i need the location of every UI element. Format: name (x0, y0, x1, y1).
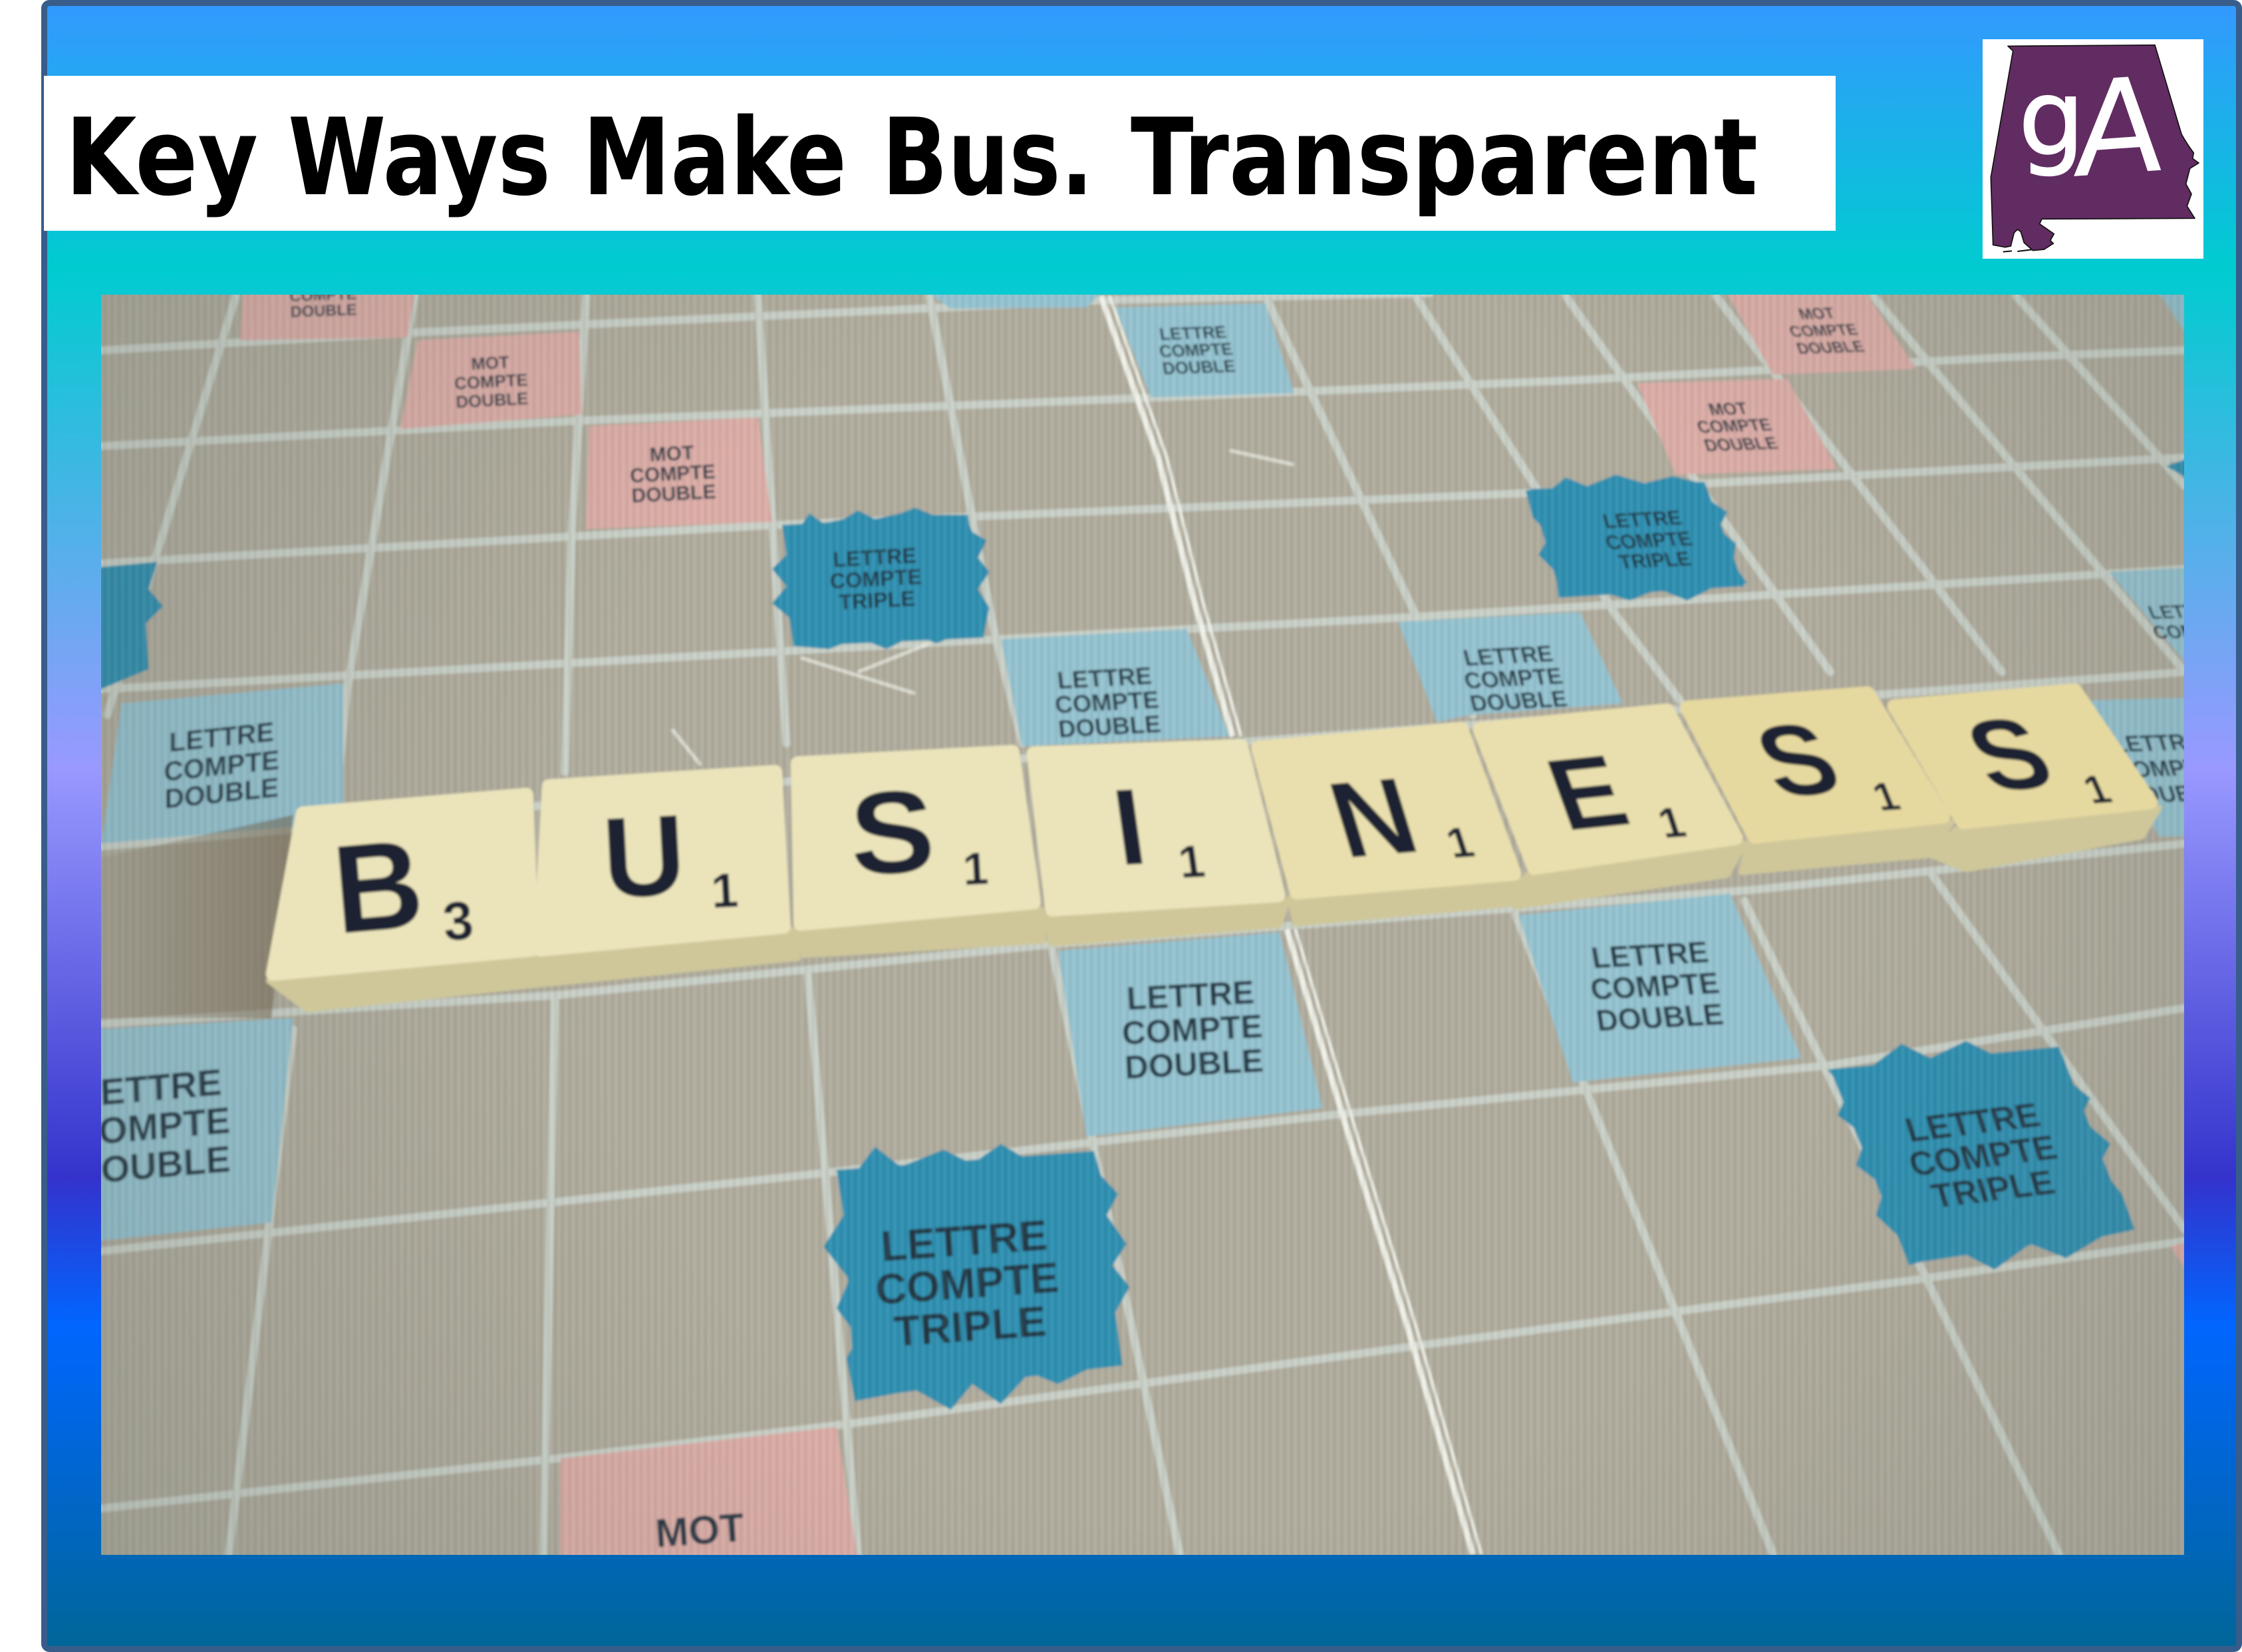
title text: Ways (288, 95, 551, 219)
board square labels: DOUBLE (1594, 998, 1726, 1037)
board squares: pink word scores (240, 293, 2187, 1558)
board square labels: DOUBLE (631, 481, 716, 507)
board square labels: DOUBLE (1057, 710, 1162, 743)
board square labels: MOT (1705, 398, 1751, 419)
tile letters and values: 1 (1652, 798, 1691, 847)
tile letters and values (327, 696, 2118, 960)
tile letters and values: S (1739, 701, 1856, 819)
board square labels: COMPTE (289, 286, 357, 305)
tile letters and values: 1 (1866, 774, 1906, 819)
board square labels: LETTRE (1461, 642, 1556, 671)
board fold and scratches (672, 296, 1844, 1554)
tile top faces (273, 746, 1278, 974)
board square labels: COMPTE (1904, 1129, 2061, 1184)
title text: Key (65, 95, 258, 219)
board square labels: COMPTE (71, 1099, 231, 1155)
board square labels: LETTRE (2108, 729, 2205, 757)
board square labels: COMPTE (164, 744, 279, 787)
board square labels: LETTRE (1126, 974, 1255, 1018)
tile letters and values: 1 (710, 863, 740, 918)
tile letters and values: I (1106, 765, 1153, 888)
board square labels: DOUBLE (1468, 686, 1570, 716)
board square labels: COMPTE (629, 461, 716, 487)
tile letters and values: 1 (962, 843, 990, 895)
tile letters and values: S (1948, 696, 2070, 813)
board square labels: COMPTE (1121, 1008, 1264, 1052)
board square labels: TRIPLE (893, 1297, 1048, 1355)
tile letters and values: 1 (1441, 818, 1479, 867)
board square labels: COMPTE (1158, 340, 1234, 361)
board square labels: COMPTE (2150, 620, 2237, 643)
board square labels (70, 286, 2237, 1604)
board square labels: COMPTE (829, 565, 922, 593)
tile shadow (100, 815, 293, 1018)
tile letters and values: B (327, 812, 428, 960)
board square labels: LETTRE (879, 1211, 1049, 1270)
board square labels: MOT (471, 353, 510, 374)
board square labels: DOUBLE (73, 1137, 231, 1193)
board squares: light blue letter scores (97, 293, 2187, 1241)
board square labels: COMPTE (1786, 321, 1861, 341)
board square labels: MOT (1796, 305, 1838, 323)
board square labels: DOUBLE (2121, 780, 2225, 809)
board square labels: LETTRE (1158, 323, 1228, 344)
board square labels: COMPTE (1588, 966, 1722, 1006)
tile letters and values: 1 (2076, 767, 2118, 812)
board square labels: COMPTE (1053, 686, 1161, 718)
board square labels: TRIPLE (838, 587, 916, 615)
board square labels: COMPTE (1603, 527, 1695, 554)
board square labels: MOT (654, 1505, 746, 1556)
photo: scrabble board spelling BUSINESS (70, 286, 2237, 1604)
tile side faces (269, 808, 2159, 1010)
board square labels: DOUBLE (1701, 434, 1780, 455)
board square labels: COMPTE (1694, 415, 1774, 437)
board square labels: LETTRE (77, 1061, 222, 1115)
board square labels: DOUBLE (456, 390, 529, 412)
board square labels: LETTRE (2145, 601, 2225, 623)
tile letters and values: N (1316, 756, 1431, 881)
board square labels: COMPTE (616, 1548, 790, 1604)
board square labels: LETTRE (1901, 1096, 2044, 1150)
board square labels: MOT (649, 442, 695, 466)
tile letters and values: S (847, 765, 938, 900)
board square labels: COMPTE (1462, 664, 1565, 694)
board square labels: TRIPLE (1927, 1164, 2059, 1216)
logo: gA on Alabama outline: g (2019, 58, 2084, 179)
board square labels: COMPTE (874, 1253, 1060, 1314)
board square labels: DOUBLE (290, 301, 357, 321)
tile letters and values: 3 (440, 890, 476, 953)
board square labels: LETTRE (169, 716, 274, 758)
logo: gA on Alabama outline: A (2072, 48, 2166, 207)
board squares: teal triple letter scores with jagged edges (94, 458, 2191, 1410)
tile letters and values: 1 (1175, 836, 1208, 888)
board square labels: DOUBLE (1124, 1042, 1264, 1086)
board square labels: LETTRE (1600, 507, 1685, 533)
board square labels: DOUBLE (1161, 357, 1237, 378)
board square labels: DOUBLE (164, 771, 279, 815)
tile letters and values: U (599, 791, 688, 922)
board square labels: LETTRE (1589, 935, 1711, 975)
title text: Make (583, 95, 847, 219)
board square labels: COMPTE (454, 371, 528, 393)
title text: Bus. (882, 95, 1093, 219)
tile letters and values: E (1533, 734, 1642, 853)
board square labels: COMPTE (2112, 754, 2218, 783)
board square labels: LETTRE (833, 543, 917, 571)
letter tiles (269, 690, 2159, 1010)
logo: gA on Alabama outline (1983, 39, 2203, 259)
title text: Transparent (1131, 95, 1758, 219)
board square labels: LETTRE (1055, 662, 1153, 694)
board square labels: DOUBLE (1794, 339, 1867, 358)
title banner (44, 76, 1836, 231)
board square labels: TRIPLE (1616, 548, 1694, 573)
title text (65, 95, 1758, 219)
